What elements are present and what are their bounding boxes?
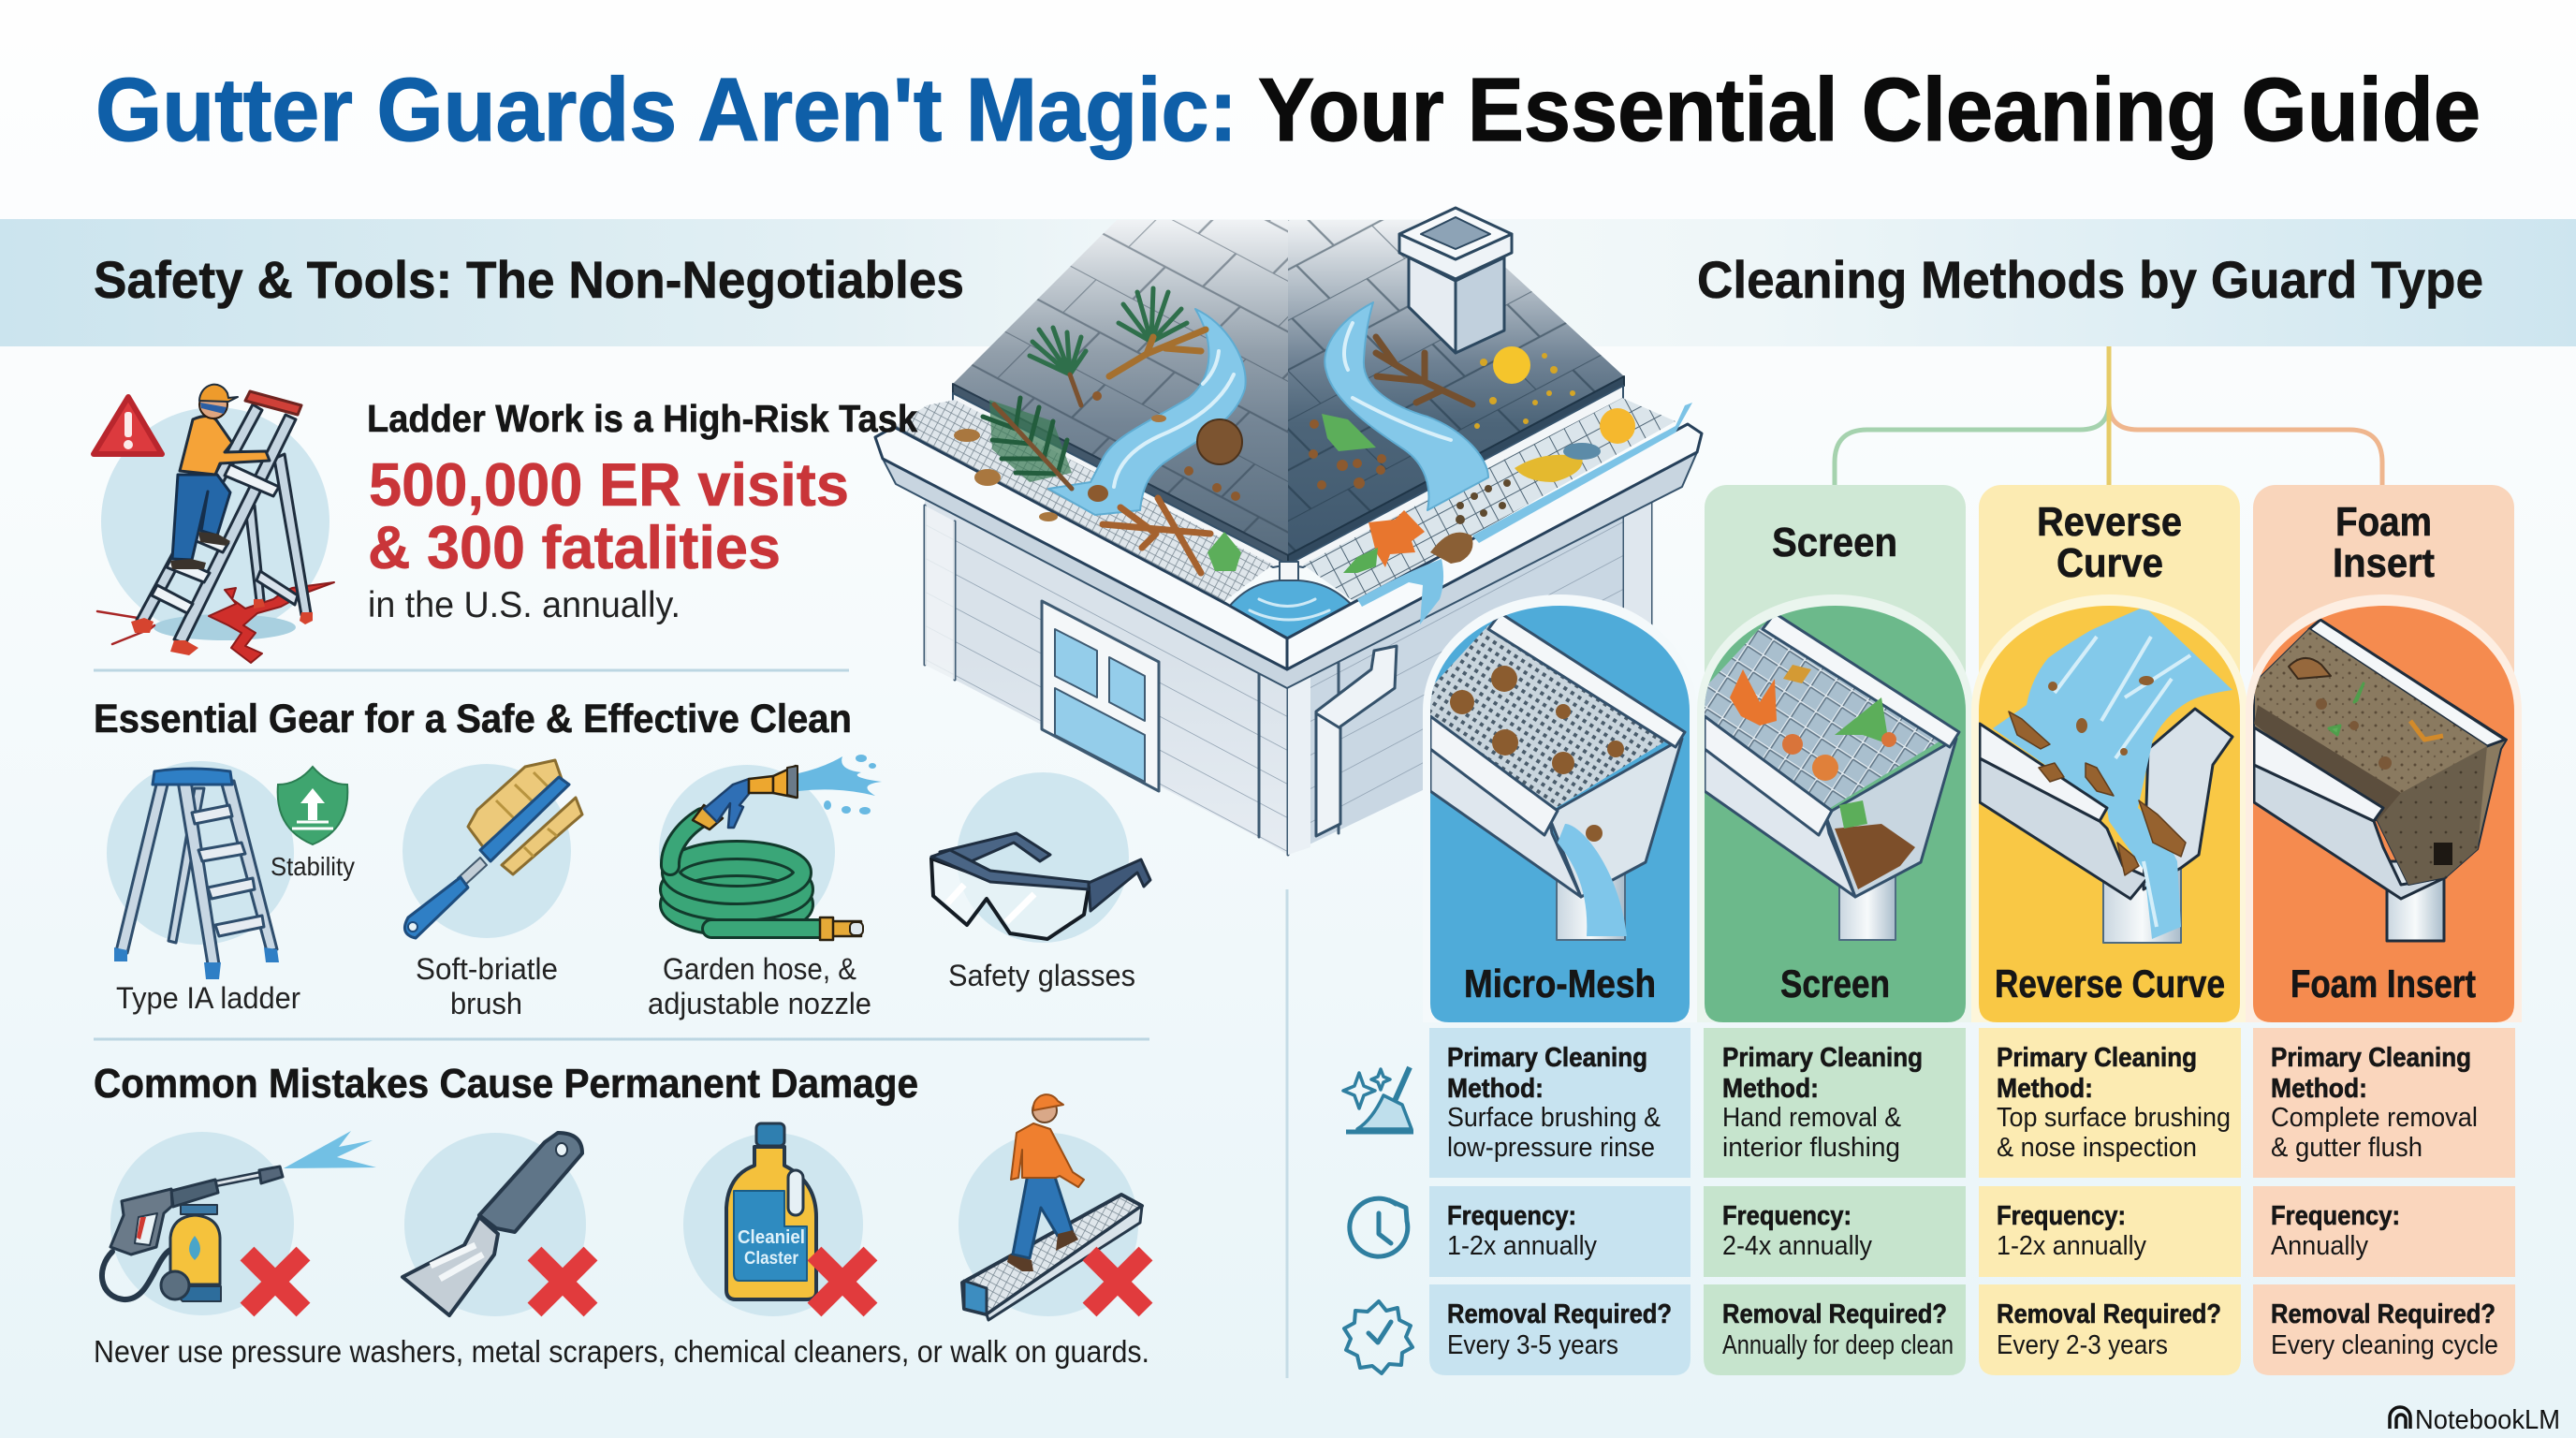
label: soft-bristle brush: Soft-briatle	[416, 952, 558, 986]
label: garden hose: adjustable nozzle	[648, 987, 871, 1020]
gutter illustration	[1980, 607, 2232, 943]
icon: broom and sparkle	[1343, 1067, 1413, 1132]
title: Gutter Guards Aren't Magic:	[95, 60, 1237, 160]
foam insert method: Complete removal	[2271, 1103, 2478, 1133]
arch background	[1423, 594, 1697, 1022]
left wall	[925, 496, 1288, 855]
icon: safety glasses	[931, 772, 1150, 943]
heading: common mistakes: Common Mistakes Cause Permanent Damage	[94, 1061, 918, 1107]
icon: garden hose	[659, 755, 882, 940]
icon: clock	[1350, 1198, 1408, 1256]
reverse curve method: Top surface brushing	[1997, 1103, 2231, 1133]
gutter fascia	[883, 452, 1697, 688]
foam insert removal	[2271, 1299, 2498, 1360]
reverse curve method: Method:	[1997, 1074, 2093, 1104]
window	[1042, 601, 1159, 791]
icon: no-go cross	[247, 1254, 303, 1310]
house illustration	[875, 208, 1702, 855]
icon: no-go cross	[814, 1254, 871, 1310]
micro-mesh frequency: Frequency:	[1447, 1201, 1576, 1231]
foam insert frequency: Frequency:	[2271, 1201, 2400, 1231]
screen frequency	[1722, 1201, 1872, 1261]
overflow water right	[1357, 403, 1692, 624]
heading: screen: Screen	[1772, 520, 1897, 565]
gutter mesh right	[1303, 398, 1676, 602]
label: safety glasses: Safety glasses	[948, 959, 1135, 992]
debris: twigs	[1103, 330, 1472, 573]
panel: ladder risk icons	[94, 385, 334, 663]
panel: reverse curve card	[1971, 485, 2247, 1022]
right wall	[1288, 496, 1651, 855]
ladder risk text: & 300 fatalities	[368, 513, 781, 581]
icon: stability shield	[278, 767, 347, 844]
corner water pool	[1229, 580, 1351, 638]
reverse curve removal: Removal Required?	[1997, 1299, 2221, 1329]
foam insert removal: Removal Required?	[2271, 1299, 2496, 1329]
arch background	[1697, 594, 1973, 1022]
foam insert method: Primary Cleaning	[2271, 1043, 2471, 1073]
heading: reverse curve: Reverse	[2037, 499, 2182, 545]
row cells	[1429, 1186, 2515, 1277]
reverse curve method: Primary Cleaning	[1997, 1043, 2197, 1073]
reverse curve removal	[1997, 1299, 2221, 1360]
label: micro-mesh: Micro-Mesh	[1464, 961, 1656, 1005]
reverse curve method: & nose inspection	[1997, 1133, 2197, 1163]
reverse curve removal: Every 2-3 years	[1997, 1330, 2168, 1360]
gutter illustration	[1430, 613, 1685, 940]
screen removal	[1722, 1299, 1954, 1360]
label: soft-bristle brush: brush	[450, 987, 522, 1020]
table: frequency row	[1350, 1186, 2515, 1277]
arch background	[1971, 594, 2247, 1022]
foam insert frequency: Annually	[2271, 1231, 2368, 1261]
heading: safety and tools: Safety & Tools: The Non-Negotiables	[94, 250, 964, 309]
heading: foam insert: Foam	[2335, 499, 2432, 545]
label: garden hose: Garden hose, &	[663, 952, 856, 986]
panel: screen card	[1697, 485, 1973, 1022]
roof left	[953, 220, 1288, 567]
icon: warning triangle	[94, 397, 162, 454]
heading: reverse curve: Curve	[2056, 540, 2163, 586]
icon: chemical cleaner bottle: Cleaniel	[738, 1227, 805, 1248]
screen removal: Removal Required?	[1722, 1299, 1947, 1329]
icon: chemical cleaner bottle: Claster	[744, 1249, 799, 1269]
connector lines to guard types	[1835, 346, 2382, 485]
micro-mesh removal: Removal Required?	[1447, 1299, 1672, 1329]
ladder risk text: 500,000 ER visits	[369, 450, 849, 519]
panel: micro-mesh card	[1423, 594, 1697, 1022]
label: garden hose	[648, 952, 871, 1020]
gutter front left	[875, 427, 1287, 669]
gutter mesh left	[894, 400, 1273, 602]
icon: pressure washer	[102, 1131, 376, 1315]
micro-mesh frequency: 1-2x annually	[1447, 1231, 1597, 1261]
ladder risk text: Ladder Work is a High-Risk Task	[367, 397, 917, 440]
icon: no-go cross	[534, 1254, 591, 1310]
foam insert method: & gutter flush	[2271, 1133, 2422, 1163]
micro-mesh frequency	[1447, 1201, 1597, 1261]
label: screen: Screen	[1780, 961, 1890, 1005]
gutter illustration	[2254, 620, 2507, 941]
chimney	[1399, 208, 1512, 353]
label: soft-bristle brush	[416, 952, 558, 1020]
screen frequency: 2-4x annually	[1722, 1231, 1872, 1261]
panel: foam insert card	[2246, 485, 2522, 1022]
card background	[1705, 485, 1966, 1022]
title	[95, 60, 2481, 160]
reverse curve method	[1997, 1043, 2231, 1163]
foam insert removal: Every cleaning cycle	[2271, 1330, 2498, 1360]
gutter illustration	[1705, 613, 1959, 940]
screen removal: Annually for deep clean	[1722, 1330, 1954, 1360]
debris: leaves and cones	[954, 346, 1635, 573]
foam insert frequency	[2271, 1201, 2400, 1261]
card background	[2253, 485, 2514, 1022]
icon: type IA ladder	[107, 761, 294, 979]
row cells	[1429, 1028, 2515, 1178]
label: stability: Stability	[271, 852, 355, 881]
heading: reverse curve	[2037, 499, 2182, 586]
heading: essential gear: Essential Gear for a Safe & Effective Clean	[94, 697, 852, 741]
table: cleaning method row	[1343, 1028, 2515, 1178]
arch background	[2246, 594, 2522, 1022]
screen method	[1722, 1043, 1923, 1163]
micro-mesh removal	[1447, 1299, 1672, 1360]
text: never use: Never use pressure washers, metal scrapers, chemical cleaners, or walk on guards.	[94, 1334, 1149, 1369]
card background	[1979, 485, 2240, 1022]
icon: no-go cross	[1090, 1254, 1146, 1310]
screen method: Hand removal &	[1722, 1103, 1901, 1133]
micro-mesh method: Method:	[1447, 1074, 1544, 1104]
reverse curve frequency: 1-2x annually	[1997, 1231, 2146, 1261]
table: removal row	[1344, 1284, 2515, 1375]
micro-mesh method: low-pressure rinse	[1447, 1133, 1655, 1163]
label: type IA ladder: Type IA ladder	[116, 981, 300, 1015]
icon: metal scraper	[402, 1133, 586, 1316]
icon: soft-bristle brush	[402, 760, 582, 938]
icon: chemical cleaner bottle	[683, 1123, 863, 1316]
icon: gear with check	[1344, 1301, 1412, 1373]
panel: common mistakes	[94, 1061, 1149, 1369]
water stream left	[1048, 309, 1246, 515]
screen method: Method:	[1722, 1074, 1819, 1104]
micro-mesh method	[1447, 1043, 1661, 1163]
section band	[0, 219, 2576, 346]
icon: worker on ladder	[97, 385, 334, 663]
water stream right	[1325, 302, 1488, 510]
label: reverse curve: Reverse Curve	[1995, 961, 2225, 1005]
foam insert method: Method:	[2271, 1074, 2367, 1104]
heading: foam insert: Insert	[2333, 540, 2435, 586]
foam insert method	[2271, 1043, 2478, 1163]
screen method: interior flushing	[1722, 1133, 1900, 1163]
heading: cleaning methods: Cleaning Methods by Guard Type	[1697, 250, 2483, 309]
label: foam insert: Foam Insert	[2291, 961, 2476, 1005]
micro-mesh method: Primary Cleaning	[1447, 1043, 1647, 1073]
panel: essential gear	[94, 697, 1150, 1020]
reverse curve frequency	[1997, 1201, 2146, 1261]
screen method: Primary Cleaning	[1722, 1043, 1923, 1073]
reverse curve frequency: Frequency:	[1997, 1201, 2126, 1231]
screen frequency: Frequency:	[1722, 1201, 1852, 1231]
NotebookLM mark: NotebookLM	[2415, 1405, 2560, 1435]
vertical divider	[1286, 889, 1288, 1378]
micro-mesh method: Surface brushing &	[1447, 1103, 1661, 1133]
ladder risk text: in the U.S. annually.	[368, 585, 681, 625]
title: Your Essential Cleaning Guide	[1258, 60, 2481, 160]
heading: foam insert	[2333, 499, 2435, 586]
row cells	[1429, 1284, 2515, 1375]
roof right	[1280, 220, 1624, 582]
downspout	[1316, 646, 1397, 836]
icon: walking on guards	[959, 1094, 1142, 1320]
debris: pine sprigs	[983, 288, 1187, 489]
micro-mesh removal: Every 3-5 years	[1447, 1330, 1618, 1360]
gutter front right	[1287, 424, 1702, 669]
ladder risk text	[367, 397, 917, 625]
